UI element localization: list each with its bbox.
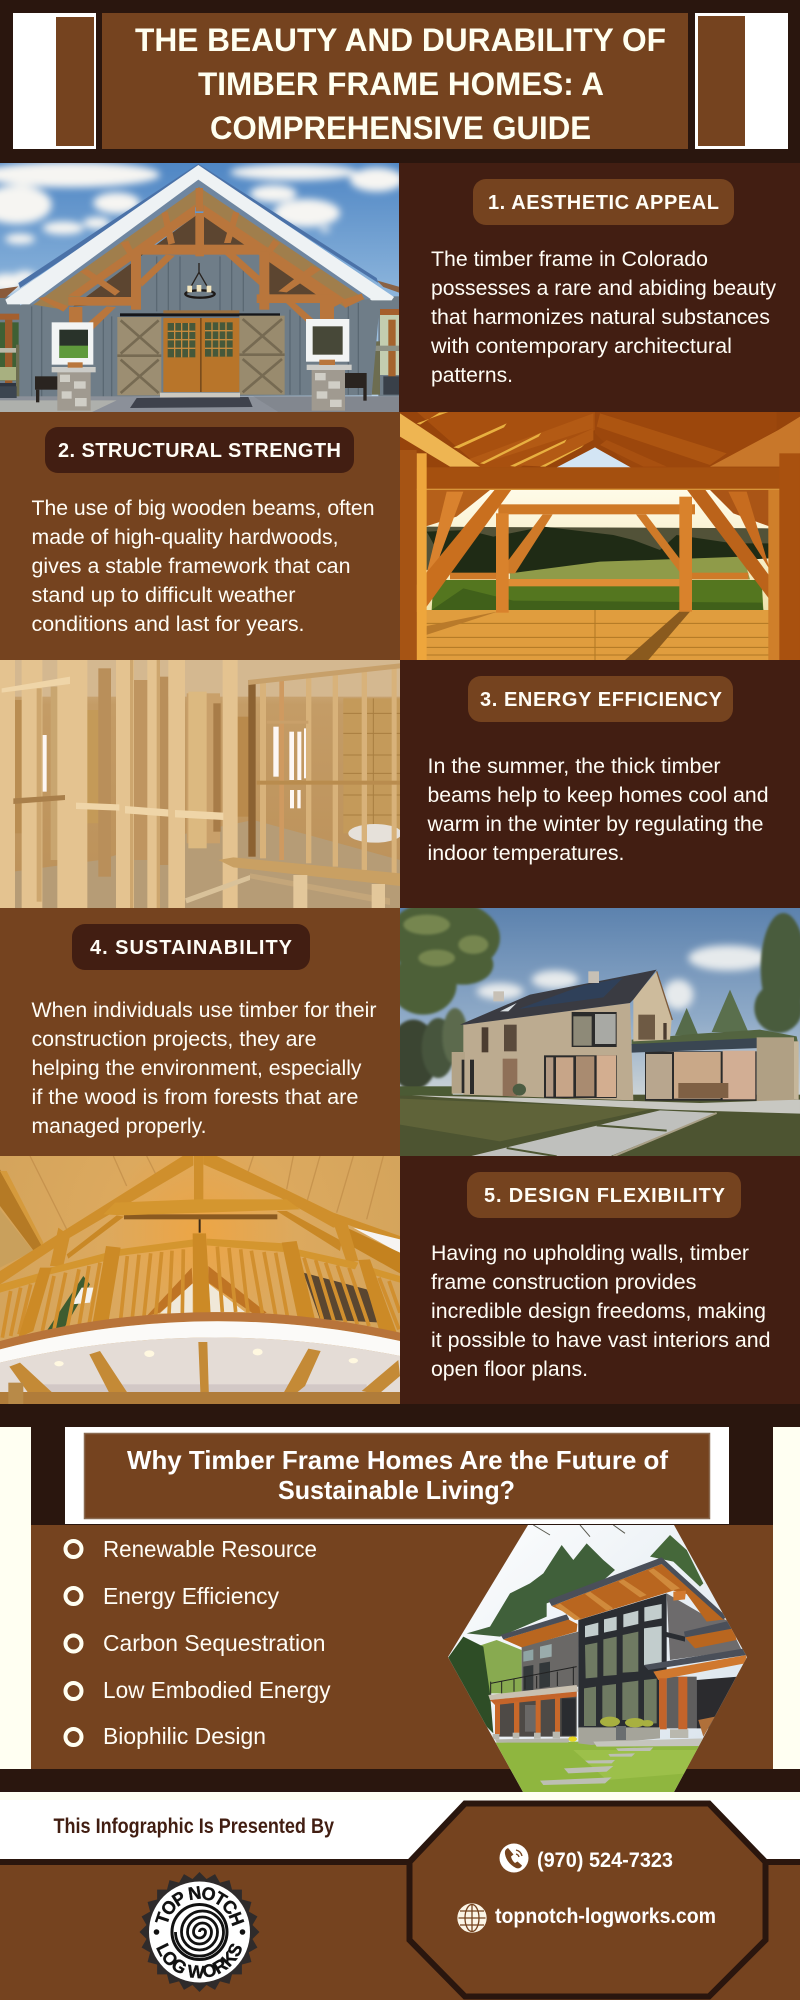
- photo: modern timber clad house: [387, 900, 800, 1158]
- text: design flexibility: incredible design freedoms, making: [431, 1300, 766, 1323]
- left roof: [503, 1619, 577, 1647]
- panel: aesthetic appeal: [399, 163, 800, 412]
- side bays: [0, 296, 20, 383]
- text: energy efficiency: warm in the winter by regulating the: [426, 813, 764, 836]
- stepping stones: [540, 1747, 653, 1785]
- text: sustainability: When individuals use timber for their: [32, 999, 377, 1022]
- heading: energy efficiency: 3. ENERGY EFFICIENCY: [480, 689, 723, 711]
- heading: energy efficiency: [468, 676, 733, 722]
- photo: timber frame overlooking field: [400, 410, 800, 660]
- right frames: [260, 668, 397, 873]
- checklist: Carbon Sequestration: [103, 1630, 326, 1656]
- checklist: [66, 1536, 331, 1749]
- logo: top notch log works: [140, 1872, 260, 1992]
- wall: [19, 253, 380, 397]
- phone number: (970) 524-7323: [537, 1849, 673, 1872]
- text: design flexibility: frame construction provides: [431, 1271, 696, 1294]
- text: design flexibility: it possible to have vast interiors and: [431, 1329, 770, 1352]
- text: structural strength: made of high-quality hardwoods,: [32, 526, 338, 549]
- title: [102, 13, 688, 149]
- title: TIMBER FRAME HOMES: A: [198, 66, 604, 102]
- view: [425, 490, 772, 611]
- panel: energy efficiency: [400, 660, 800, 908]
- truss timbers: [38, 188, 364, 330]
- heading: structural strength: 2. STRUCTURAL STRENGTH: [58, 440, 341, 462]
- photo: wall framing studs: [0, 660, 402, 910]
- text: design flexibility: open floor plans.: [431, 1358, 588, 1381]
- chandelier: [185, 263, 215, 298]
- icon: phone: [500, 1844, 528, 1872]
- title: COMPREHENSIVE GUIDE: [210, 110, 591, 146]
- text: sustainability: helping the environment, especially: [32, 1057, 362, 1080]
- contact octagon: [410, 1804, 766, 1996]
- text: aesthetic appeal: patterns.: [431, 364, 513, 387]
- photo: hexagon house: [448, 1525, 747, 1792]
- logo: top notch log works: TOP NOTCH: [154, 1886, 244, 1926]
- text: sustainability: managed properly.: [32, 1115, 206, 1138]
- icon: globe: [458, 1904, 486, 1932]
- section heading: Sustainable Living?: [278, 1475, 515, 1505]
- checklist: Biophilic Design: [103, 1723, 266, 1749]
- deck: [425, 610, 772, 660]
- trees: [467, 1543, 615, 1637]
- text: sustainability: if the wood is from forests that are: [32, 1086, 359, 1109]
- heading: sustainability: [72, 924, 310, 970]
- header banner: [0, 0, 800, 163]
- text: aesthetic appeal: The timber frame in Colorado: [431, 248, 708, 271]
- photo: timber frame porch exterior: [0, 162, 403, 413]
- heading: design flexibility: 5. DESIGN FLEXIBILITY: [484, 1185, 726, 1207]
- upper roof: [552, 1564, 725, 1622]
- panel: design flexibility: [400, 1156, 800, 1404]
- curved base: [0, 1312, 400, 1349]
- bench: [185, 875, 250, 903]
- heading: aesthetic appeal: 1. AESTHETIC APPEAL: [488, 192, 719, 214]
- right roofs: [685, 1628, 737, 1648]
- text: aesthetic appeal: with contemporary architectural: [430, 335, 732, 358]
- text: design flexibility: Having no upholding walls, timber: [431, 1242, 749, 1265]
- studs: [98, 668, 168, 877]
- title: THE BEAUTY AND DURABILITY OF: [135, 22, 666, 58]
- checklist: Renewable Resource: [103, 1536, 317, 1562]
- windows: [52, 322, 93, 365]
- roof: [18, 164, 378, 288]
- text: structural strength: stand up to difficult weather: [32, 584, 296, 607]
- heading: structural strength: [45, 427, 354, 473]
- lawn: [400, 1095, 800, 1158]
- house: [463, 1003, 633, 1100]
- section: future of sustainable living: [0, 1404, 800, 1800]
- timber frame: [425, 490, 490, 527]
- lawn: [496, 1740, 702, 1792]
- section heading: [84, 1434, 710, 1518]
- checklist: Energy Efficiency: [103, 1583, 279, 1609]
- footer: [0, 1792, 800, 2000]
- text: structural strength: The use of big wooden beams, often: [32, 497, 374, 520]
- text: energy efficiency: indoor temperatures.: [428, 842, 624, 865]
- text: energy efficiency: beams help to keep homes cool and: [428, 784, 768, 807]
- posts: [18, 1233, 397, 1338]
- right wall: [667, 1593, 742, 1660]
- heading: design flexibility: [467, 1172, 741, 1218]
- door: [163, 318, 239, 392]
- ceiling beams: [9, 1342, 400, 1392]
- logo: top notch log works: LOG WORKS: [156, 1942, 242, 1978]
- checklist: Low Embodied Energy: [103, 1677, 331, 1703]
- text: structural strength: gives a stable framework that can: [32, 555, 350, 578]
- text: sustainability: construction projects, they are: [32, 1028, 316, 1051]
- website: topnotch-logworks.com: [495, 1905, 716, 1928]
- panel: sustainability: [0, 908, 400, 1156]
- section heading: Why Timber Frame Homes Are the Future of: [127, 1445, 668, 1475]
- barn doors: [117, 316, 285, 395]
- right decorative bracket: [695, 13, 788, 149]
- lights: [54, 1349, 358, 1366]
- terrace and path: [412, 1095, 800, 1114]
- stone bases: [57, 371, 91, 411]
- presented by label: This Infographic Is Presented By: [54, 1815, 334, 1838]
- left decorative bracket: [13, 13, 96, 149]
- text: aesthetic appeal: possesses a rare and abiding beauty: [431, 277, 776, 300]
- truss: [194, 1156, 203, 1201]
- text: energy efficiency: In the summer, the thick timber: [428, 755, 721, 778]
- bag: [348, 824, 402, 843]
- text: aesthetic appeal: that harmonizes natural substances: [431, 306, 770, 329]
- railing background: [47, 1276, 90, 1331]
- glass block: [578, 1593, 667, 1728]
- photo: vaulted timber ceiling with balcony: [0, 1156, 400, 1406]
- text: structural strength: conditions and last for years.: [32, 613, 304, 636]
- planter: [578, 1727, 660, 1745]
- ground: [0, 396, 400, 413]
- door track: [120, 313, 280, 316]
- benches: [35, 376, 58, 390]
- balusters: [2, 1247, 400, 1338]
- heading: sustainability: 4. SUSTAINABILITY: [90, 937, 293, 959]
- panel: structural strength: [0, 412, 400, 660]
- heading: aesthetic appeal: [473, 179, 734, 225]
- rails: [0, 1239, 400, 1293]
- left wing: [522, 1632, 578, 1693]
